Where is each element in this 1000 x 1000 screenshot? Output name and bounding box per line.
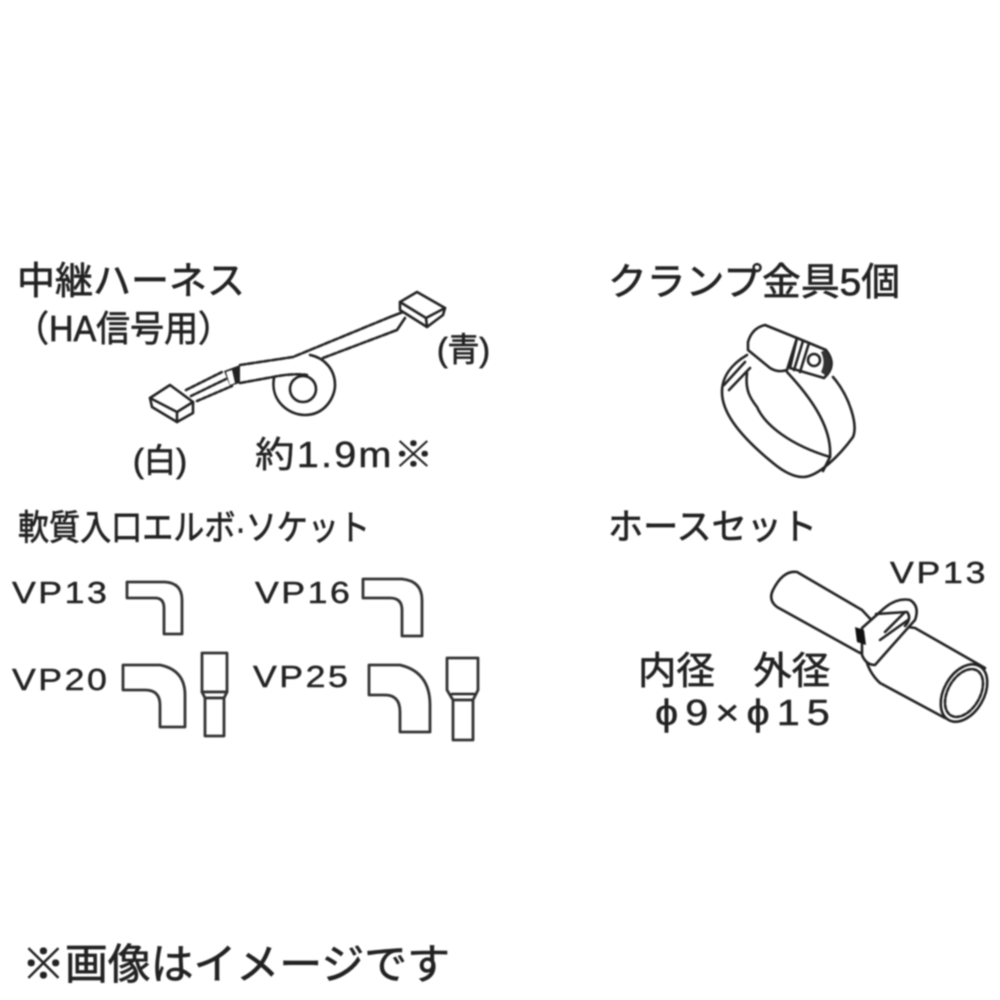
heading: relay harness: （HA信号用）	[15, 308, 232, 349]
footnote: ※画像はイメージです	[22, 941, 450, 988]
panel: soft inlet elbow and socket	[12, 509, 478, 740]
item: VP13 elbow: VP13	[12, 576, 109, 610]
panel: hose set	[608, 506, 997, 733]
icon: harness cable with connectors	[150, 292, 445, 422]
item: VP20 elbow and socket: VP20	[12, 663, 109, 697]
item: VP16 elbow: VP16	[255, 576, 352, 610]
heading: relay harness	[15, 261, 245, 349]
item: VP16 elbow	[255, 576, 422, 636]
heading: soft inlet elbow socket: 軟質入口エルボ·ソケット	[18, 509, 370, 548]
heading: relay harness: 中継ハーネス	[17, 261, 245, 303]
panel: clamp fittings	[608, 262, 900, 477]
item: VP20 elbow and socket	[12, 653, 227, 736]
heading: clamp fittings: クランプ金具5個	[608, 262, 900, 304]
label: blue connector: (青)	[437, 331, 490, 368]
label: inner and outer diameter: 内径 外径	[638, 651, 830, 693]
label: inner and outer diameter: ϕ9×ϕ15	[655, 693, 830, 733]
label: white connector: (白)	[133, 442, 187, 479]
label: hose size VP13: VP13	[890, 556, 988, 590]
item: VP13 elbow	[12, 576, 182, 634]
label: inner and outer diameter	[638, 651, 830, 733]
item: VP25 elbow and socket: VP25	[253, 660, 350, 694]
panel: relay harness	[15, 261, 490, 479]
item: VP25 elbow and socket	[253, 658, 478, 740]
heading: hose set: ホースセット	[608, 506, 817, 547]
label: cable length: 約1.9m※	[255, 436, 433, 476]
icon: hose with clip	[771, 572, 997, 730]
icon: hose clamp	[722, 325, 854, 477]
